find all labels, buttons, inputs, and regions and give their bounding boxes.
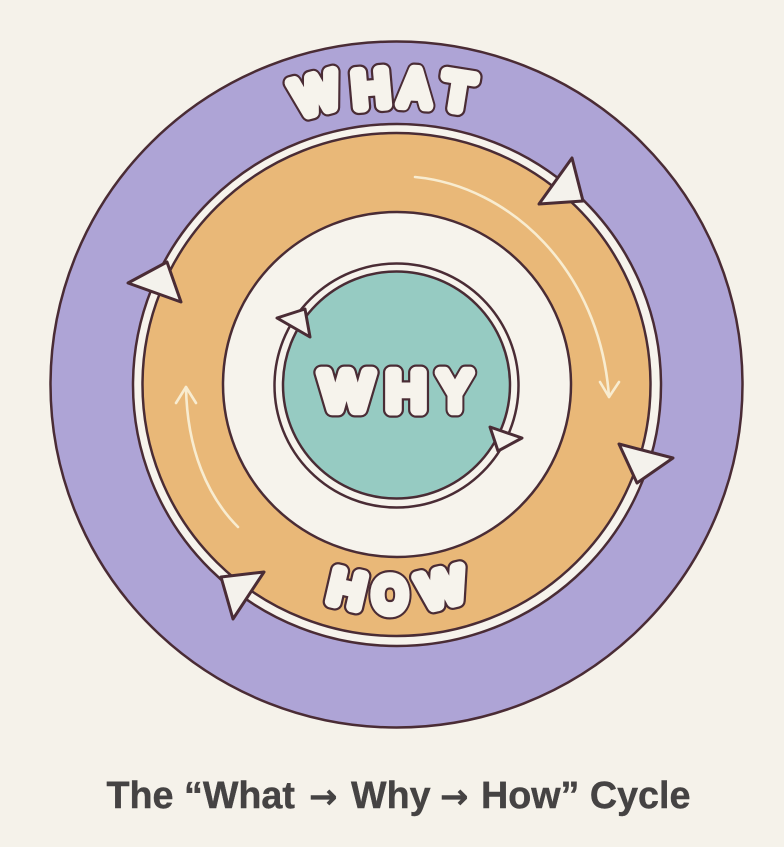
label: WHY: W [321, 362, 372, 422]
label: WHY: H [386, 362, 426, 422]
label: HOW: O [374, 570, 406, 622]
arrow: inner upper left triangle [277, 309, 310, 337]
label: WHY [321, 360, 471, 422]
panel: inner white ring [223, 212, 571, 557]
panel: WHY ring border [274, 264, 518, 508]
panel: HOW ring border [133, 124, 661, 646]
title: → [440, 777, 468, 817]
label: WHAT: H [351, 60, 391, 118]
label: HOW: H [325, 559, 370, 618]
label: HOW [325, 557, 470, 622]
arrow: upper left triangle [128, 262, 181, 302]
arrow: top right triangle [539, 158, 583, 204]
label: WHAT: T [439, 62, 477, 122]
panel: outer WHAT ring [50, 42, 742, 728]
label: WHY: Y [439, 360, 471, 421]
arrow: inner lower right triangle [490, 427, 522, 451]
title: Why [351, 774, 431, 816]
title: → [309, 777, 338, 817]
label: HOW: W [414, 557, 470, 618]
label: WHAT: W [287, 62, 345, 127]
label: WHAT: A [399, 59, 432, 116]
title: The “What [106, 774, 295, 816]
label: WHAT: W [287, 62, 345, 127]
label: WHAT: T [439, 62, 477, 122]
label: HOW: O [374, 570, 406, 622]
label: HOW: W [414, 557, 470, 618]
label: WHAT: A [399, 59, 432, 116]
label: WHAT: H [351, 60, 391, 118]
arrow: bottom left triangle [221, 572, 264, 619]
label: WHY: H [386, 362, 426, 422]
arrow: light curved left [176, 387, 238, 527]
label: WHAT [287, 59, 477, 127]
panel: HOW orange ring [142, 133, 650, 636]
arrow: lower right triangle [619, 444, 673, 483]
title: How” Cycle [481, 774, 690, 816]
label: WHY: Y [439, 360, 471, 421]
arrow: light curved right [415, 177, 619, 397]
panel: WHY teal circle [283, 272, 510, 498]
label: HOW: H [325, 559, 370, 618]
label: WHY: W [321, 362, 372, 422]
